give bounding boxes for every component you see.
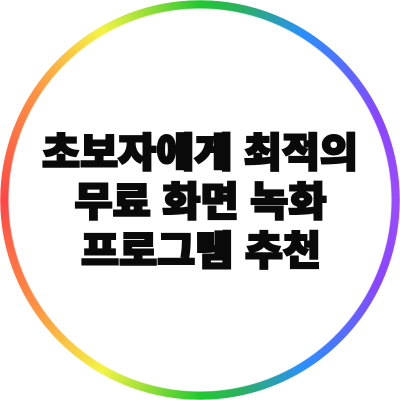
title line 3: 프로그램 추천 (81, 230, 321, 274)
title line 1: 초보자에게 최적의 (42, 132, 358, 176)
title line 2: 무료 화면 녹화 (74, 180, 326, 224)
